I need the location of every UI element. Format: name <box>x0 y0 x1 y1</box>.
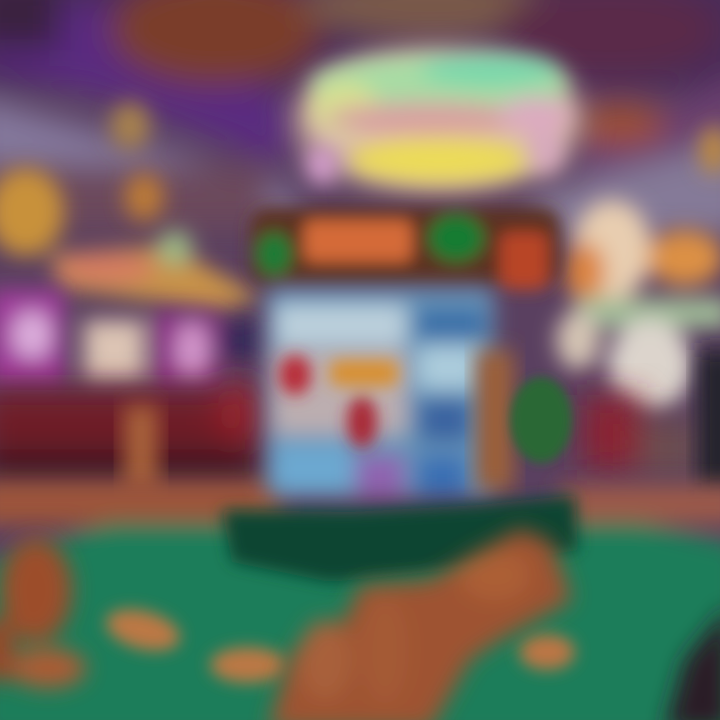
machine right trim <box>476 350 514 490</box>
machine top sign <box>250 208 560 290</box>
right wall glow and machines <box>556 200 720 490</box>
green wheel <box>510 377 572 463</box>
chandelier <box>296 50 580 190</box>
central slot machine <box>222 208 578 582</box>
dark foreground corner <box>665 605 720 720</box>
left wall glow and machines <box>0 168 262 495</box>
floor <box>0 480 720 720</box>
ceiling <box>0 0 720 240</box>
machine body <box>266 288 494 497</box>
machine base <box>222 495 578 582</box>
ceiling lights <box>110 102 720 221</box>
machine reels <box>279 355 398 448</box>
stacks of chips <box>0 528 575 720</box>
